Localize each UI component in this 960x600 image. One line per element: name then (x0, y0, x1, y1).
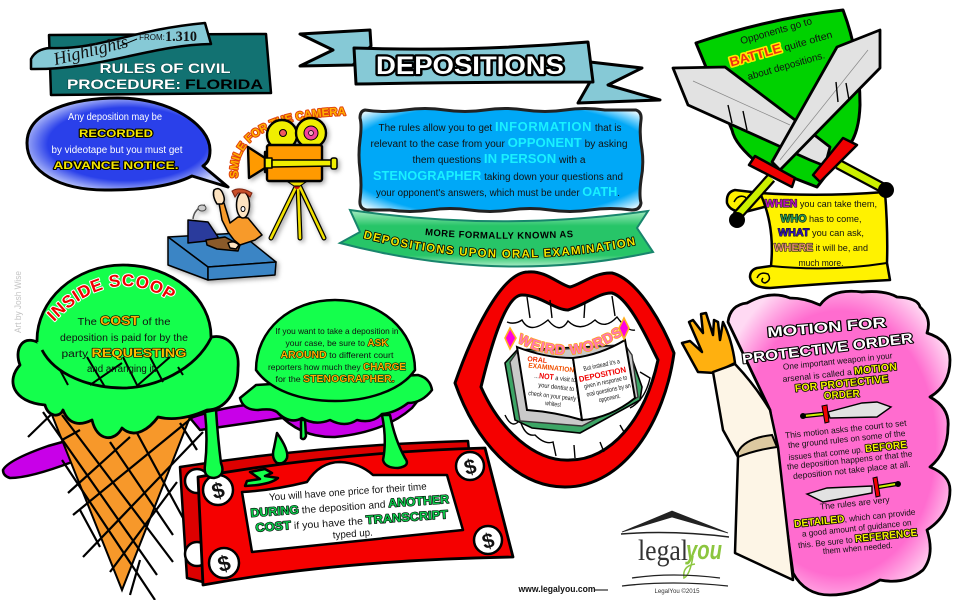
scroll: when who what where: WHERE it will be, and (774, 242, 868, 254)
text: motion description: FOR PROTECTIVE (794, 373, 889, 395)
banner title text: PROCEDURE: (67, 76, 181, 92)
scoop: inside scoop: The COST of the (78, 314, 171, 328)
text: motion description (782, 350, 897, 402)
speech bubble: recorded: Any deposition may be (68, 112, 162, 123)
icon: dollar coin top left: $ (209, 477, 227, 504)
illustration: open book: your dentist to (538, 382, 575, 393)
scoop: inside scoop: deposition is paid for by the (60, 333, 188, 344)
banner title text: RULES OF CIVIL (100, 60, 231, 76)
ribbon: highlights from 1.310: FROM: (139, 33, 165, 42)
scroll: when who what where: much more. (798, 258, 844, 269)
illustration: open book: DEPOSITION (578, 365, 627, 384)
scoop: inside scoop: INSIDE SCOOP (46, 273, 176, 322)
shield: battle: Opponents go to (739, 16, 814, 47)
ribbon: highlights from 1.310: Highlights (50, 31, 130, 69)
scoop: ask around: your case, be sure to ASK (286, 338, 389, 349)
scoop: inside scoop (12, 264, 240, 440)
icon: dollar coin bottom right (474, 526, 502, 554)
ribbon: highlights from 1.310 (31, 23, 211, 69)
illustration: open book: ...NOT a visit to (534, 371, 577, 384)
illustration: open book: opponent. (598, 393, 621, 404)
logo: legalyou: you (685, 535, 722, 565)
scoop: ask around: reporters how much they CHARGE (268, 362, 406, 373)
icon: dollar coin top right (456, 452, 484, 480)
text: court ground rules: the ground rules on some of the (787, 428, 906, 450)
arched caption: smile for the camera: SMILE FOR THE CAMERA (228, 106, 347, 179)
illustration: open book: whites! (544, 400, 562, 409)
text: court ground rules: This motion asks the court to set (784, 418, 908, 440)
panel: rules explanation (359, 108, 643, 212)
text: court ground rules: deposition not take place at all. (792, 459, 911, 481)
callout: bill text (242, 462, 463, 552)
illustration: person at desk (168, 189, 276, 280)
text: court ground rules: the deposition happens or that the (787, 448, 913, 472)
panel: rules explanation: your opponent's answers, which must be under OATH. (376, 184, 620, 199)
icon: crossed swords (673, 30, 894, 228)
text: motion description: ORDER (823, 388, 861, 402)
callout: bill text: You will have one price for their time (269, 481, 427, 504)
text: detailed rules: them when needed. (822, 540, 893, 556)
illustration: open book: ORAL (527, 356, 548, 365)
teeth lines (505, 296, 650, 458)
icon: small sword top (800, 402, 891, 423)
bills: front bill (198, 448, 513, 585)
title ribbon: depositions: DEPOSITIONS (376, 52, 564, 80)
speech bubble: recorded (27, 98, 228, 190)
scoop: ask around: AROUND to different court (280, 350, 394, 361)
scroll: when who what where: WHEN you can take them, (765, 198, 877, 210)
speech bubble: recorded: RECORDED (79, 128, 153, 140)
illustration: ice cream cone (28, 403, 203, 600)
panel: rules explanation: them questions IN PERSON with a (412, 151, 586, 166)
illustration: open book: EXAMINATION (528, 363, 574, 374)
text: motion description: One important weapon in your (782, 350, 893, 372)
callout: bill text: typed up. (332, 528, 373, 541)
icon: dollar coin bottom left (209, 548, 239, 578)
icon: dollar coin bottom left: $ (215, 550, 233, 577)
scoop: ask around: for the STENOGRAPHER. (276, 374, 395, 385)
text: court ground rules (784, 418, 913, 481)
panel: rules explanation: relevant to the case from your OPPONENT by asking (370, 135, 628, 150)
scoop: ask around (240, 300, 432, 424)
title ribbon: depositions (300, 30, 660, 103)
logo: legalyou: LegalYou ©2015 (654, 587, 700, 595)
callout: bill text: COST if you have the TRANSCRIPT (255, 507, 449, 535)
ribbon: highlights from 1.310: 1.310 (165, 29, 197, 45)
text: detailed rules (793, 494, 918, 556)
text: detailed rules: The rules are very (819, 494, 891, 512)
speech bubble: recorded: by videotape but you must get (52, 145, 183, 156)
illustration: mouth with lips (455, 272, 674, 487)
icon: video camera on tripod (248, 118, 337, 238)
scroll: when who what where: WHO has to come, (780, 213, 862, 225)
drips: melted ice cream (205, 410, 407, 486)
shield: battle: BATTLE quite often (728, 26, 834, 69)
text: detailed rules: a good amount of guidance on (801, 517, 912, 539)
icon: dollar coin bottom right: $ (480, 529, 497, 554)
scoop: ask around: If you want to take a deposition in (276, 326, 399, 336)
text: court ground rules: issues that come up. BEFORE (788, 439, 907, 463)
icon: dollar coin top right: $ (462, 455, 479, 480)
credit: art by josh wise: Art by Josh Wise (13, 271, 24, 333)
heading: motion for protective order: MOTION FOR (767, 314, 887, 340)
illustration: raised arm and hand (682, 313, 793, 580)
shield: battle (696, 10, 860, 187)
icon: small sword bottom (807, 477, 901, 502)
icon: dollar coin top left (203, 475, 233, 505)
text: motion description: arsenal is called a MOTION (782, 361, 897, 385)
text: detailed rules: DETAILED, which can provide (793, 506, 916, 530)
bills: back bill (180, 441, 470, 582)
ribbon: formally known as (337, 208, 655, 268)
ribbon: formally known as: MORE FORMALLY KNOWN AS (426, 228, 573, 239)
scroll: when who what where: WHAT you can ask, (778, 227, 864, 239)
ribbon: formally known as: DEPOSITIONS UPON ORAL EXAMINATION (363, 230, 636, 258)
illustration: open book: check on your pearly (528, 390, 577, 403)
banner: rules of civil procedure (31, 23, 271, 95)
spoon: purple handle (3, 398, 420, 478)
shield: battle: about depositions. (746, 50, 826, 83)
heading: weird words: WEIRD WORDS (518, 327, 622, 356)
panel: rules explanation: The rules allow you to get INFORMATION that is (378, 119, 622, 134)
banner title text: FLORIDA (185, 76, 263, 92)
callout: bill text: DURING the deposition and ANOTHER (250, 492, 450, 520)
illustration: open book: oral questions by an (586, 382, 632, 399)
scroll: when who what where (727, 190, 890, 288)
illustration: open book: But instead it's a (583, 358, 621, 373)
heading: motion for protective order (741, 314, 914, 366)
scoop: inside scoop: and arranging it. (87, 364, 157, 375)
panel: rules explanation: STENOGRAPHER taking down your questions and (373, 168, 623, 183)
logo: legalyou: legal (638, 534, 688, 567)
text: detailed rules: this. Be sure to REFERENCE (797, 527, 918, 551)
scoop: inside scoop: party REQUESTING (62, 346, 186, 360)
heading: motion for protective order: PROTECTIVE ORDER (741, 330, 914, 366)
speech bubble: recorded: ADVANCE NOTICE. (54, 160, 178, 172)
banner title text (67, 60, 263, 92)
heading: weird words (504, 316, 630, 356)
illustration: open book: given in response to (583, 374, 628, 391)
url: website: www.legalyou.com (518, 584, 596, 594)
logo: legalyou (621, 511, 729, 595)
illustration: open book (505, 340, 642, 433)
panel: motion for protective order (728, 291, 950, 595)
